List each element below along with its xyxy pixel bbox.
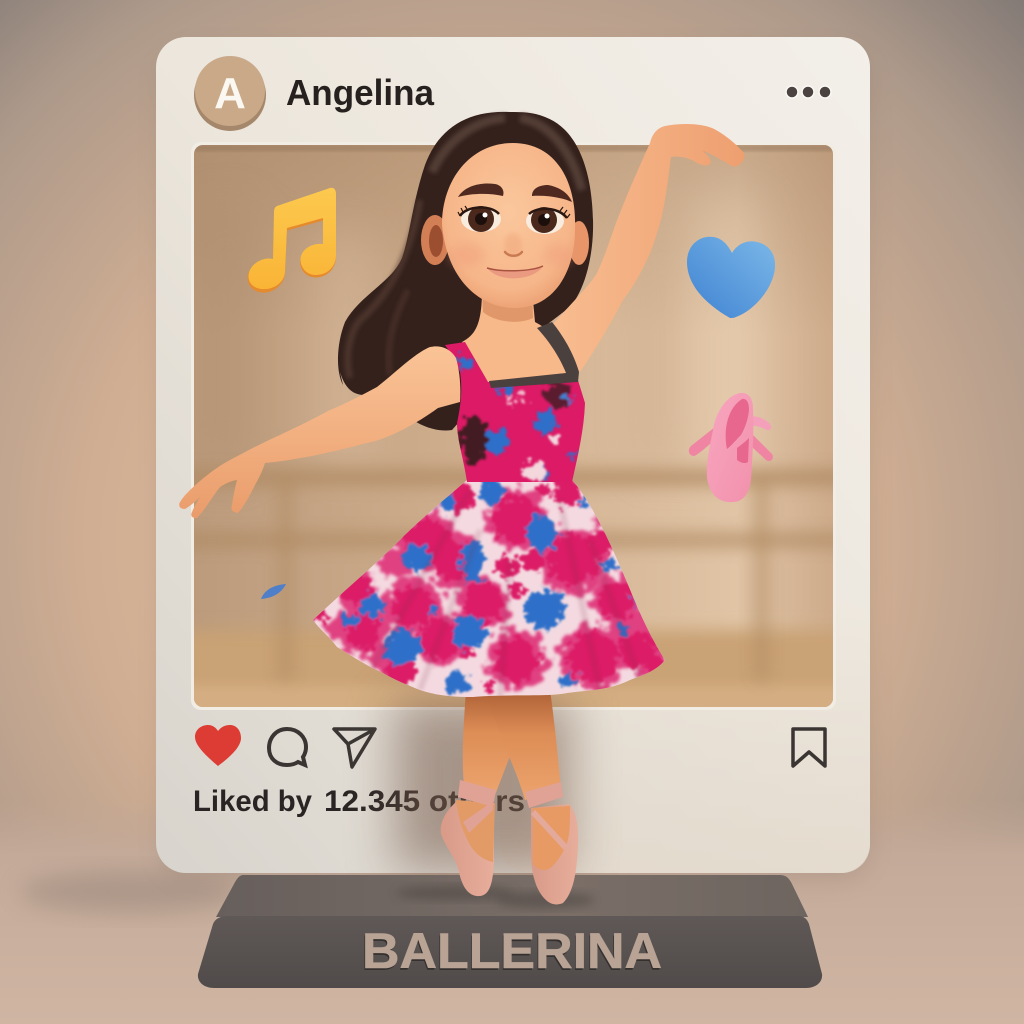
panel: post card (156, 37, 870, 873)
hair (338, 112, 593, 431)
back leg (463, 690, 510, 795)
eyes (461, 206, 501, 232)
face (442, 143, 575, 308)
icon: small blue petal (261, 584, 286, 599)
mouth (487, 266, 543, 278)
avatar: A (214, 69, 246, 118)
outstretched arm (179, 346, 460, 518)
base label: BALLERINA (362, 923, 662, 979)
ears (421, 215, 589, 265)
icon: send arrow (334, 729, 375, 767)
username: Angelina (286, 72, 435, 113)
raised arm (552, 124, 744, 372)
left pointe shoe (441, 780, 496, 896)
skirt (313, 480, 665, 697)
icon: more menu dots (786, 86, 831, 98)
likes caption: 12.345 others (324, 785, 525, 818)
avatar (194, 56, 266, 131)
nose (504, 233, 522, 257)
front leg (487, 690, 561, 800)
torso and neck (462, 290, 578, 386)
icon: pink ballet slipper (689, 393, 773, 502)
eyebrows (458, 184, 504, 197)
right pointe shoe (525, 782, 578, 905)
dark neckline and strap (489, 322, 579, 388)
likes caption (193, 785, 525, 818)
bodice (445, 342, 585, 482)
icon: bookmark (793, 729, 825, 766)
panel: photo of ballet studio (180, 142, 850, 720)
base label: BALLERINA (361, 925, 661, 981)
icon: red like heart (195, 725, 241, 766)
neck shadow (482, 288, 533, 322)
icon: blue heart (687, 237, 775, 318)
icon: comment bubble (269, 729, 306, 765)
panel: display base (198, 875, 822, 988)
likes caption: Liked by (193, 785, 312, 818)
figure: ballerina (179, 112, 744, 905)
figure shadow on card (395, 700, 570, 870)
icon: yellow music note (248, 188, 336, 293)
